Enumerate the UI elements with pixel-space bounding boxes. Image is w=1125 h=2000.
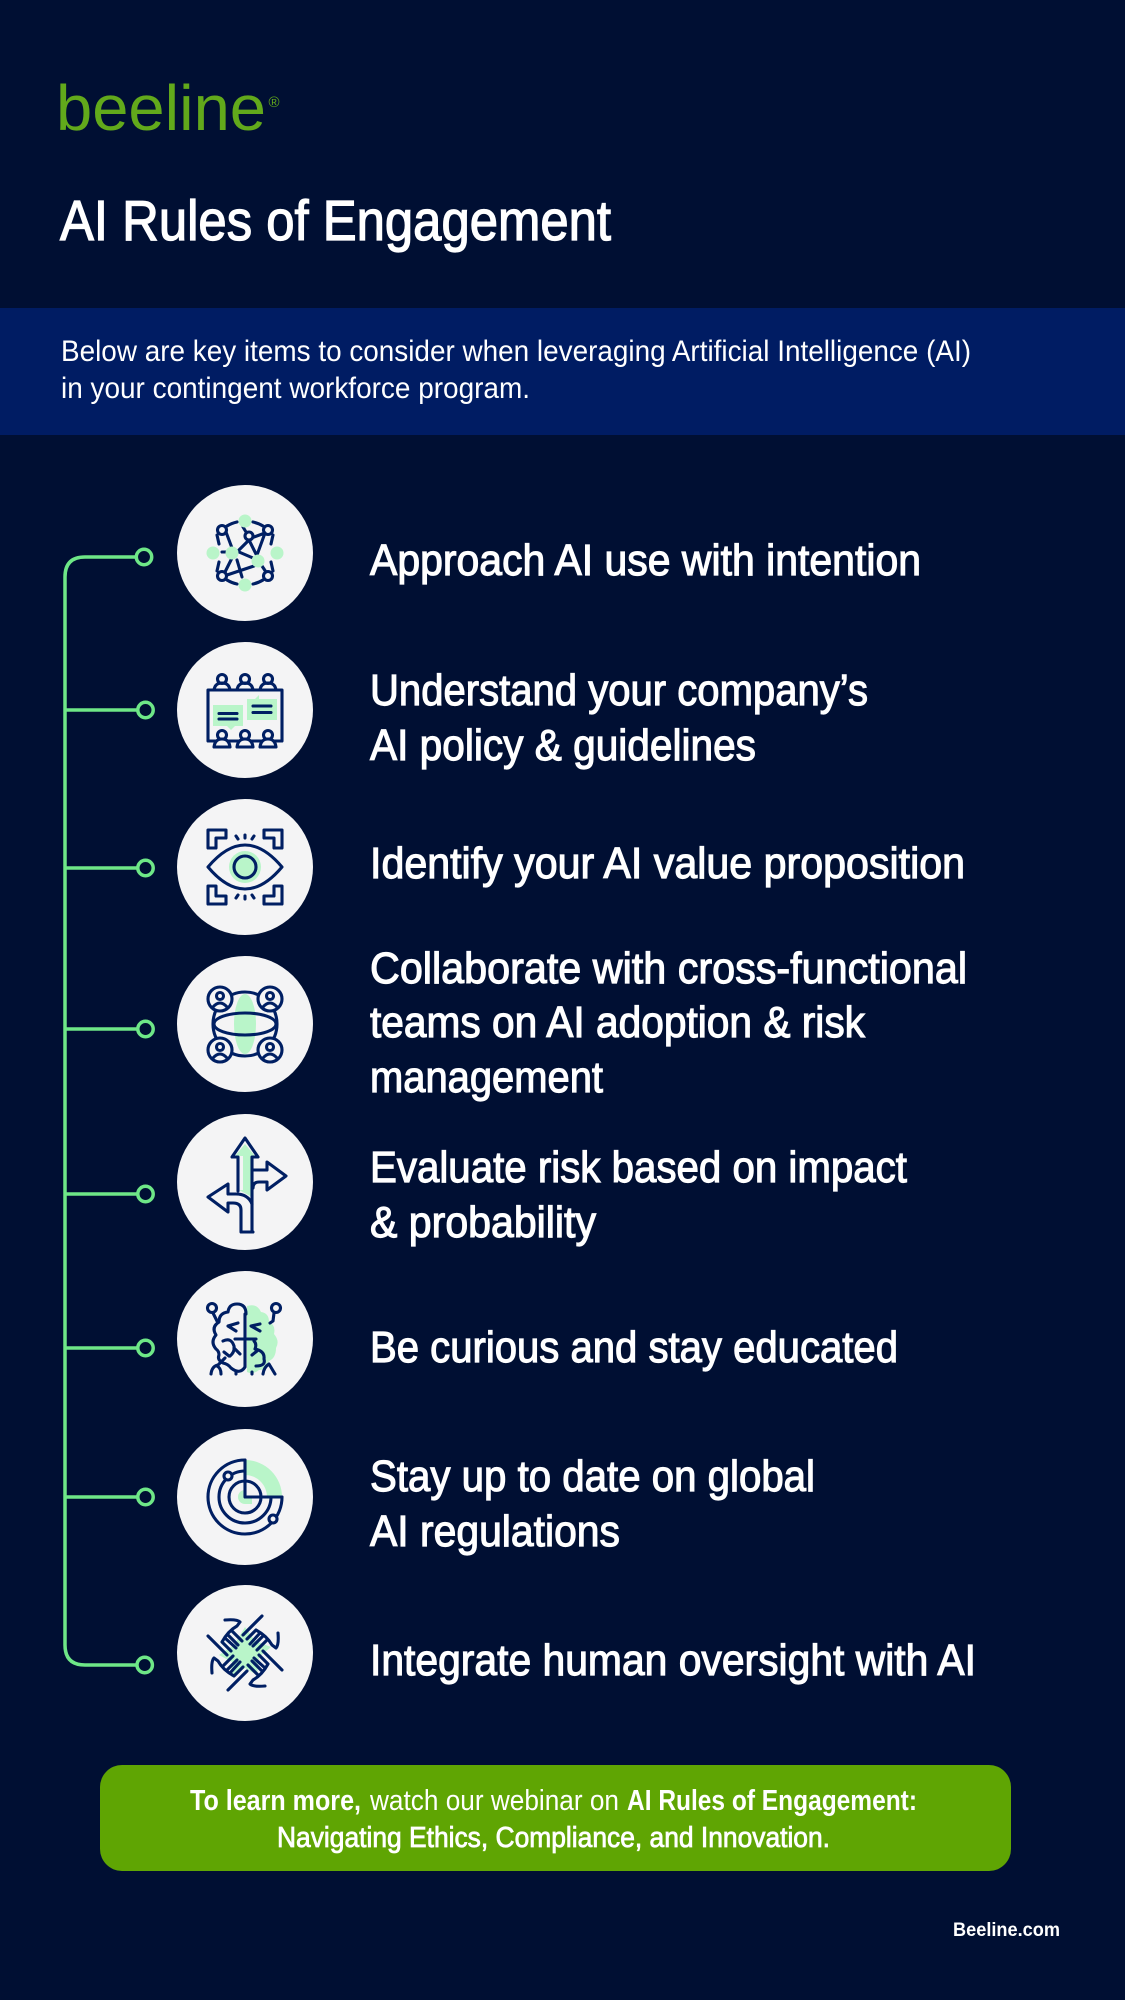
icon: eye scan [177,799,313,935]
item 8 text: Integrate human oversight with AI [370,1636,976,1685]
item 2 text: AI policy & guidelines [370,721,756,770]
intro band: Below are key items to consider when leveraging Artificial Intelligence (AI) [61,335,971,368]
intro band [0,308,1125,435]
item 4 text: teams on AI adoption & risk [370,998,866,1047]
item 2 text: Understand your company’s [370,666,868,715]
item 3 text: Identify your AI value proposition [370,839,965,888]
call to action button: Navigating Ethics, Compliance, and Innovation. [277,1822,830,1854]
item 4 text: Collaborate with cross-functional [370,944,967,993]
timeline connector [65,549,153,1673]
item 4 text [370,944,967,1102]
intro band: in your contingent workforce program. [61,372,530,405]
call to action button: AI Rules of Engagement: [627,1785,917,1817]
call to action button [100,1765,1011,1871]
item 6 text: Be curious and stay educated [370,1323,898,1372]
icon: AI brain [177,1271,313,1407]
icon: meeting table [177,642,313,778]
icon: collaboration circle [177,956,313,1092]
logo: beeline: beeline [56,72,266,144]
item 4 text: management [370,1053,603,1102]
title: AI Rules of Engagement [60,189,611,253]
call to action button: To learn more, [190,1785,361,1817]
item 7 text [370,1452,815,1556]
icon: joined hands [177,1585,313,1721]
footer link text: Beeline.com [953,1919,1060,1941]
item 5 text [370,1143,907,1247]
logo: beeline: ® [268,94,280,111]
item 5 text: Evaluate risk based on impact [370,1143,907,1192]
item 7 text: AI regulations [370,1507,620,1556]
icon: network globe [177,485,313,621]
item 2 text [370,666,868,770]
item 5 text: & probability [370,1198,596,1247]
call to action button: watch our webinar on [369,1785,619,1817]
icon: branching arrows [177,1114,313,1250]
icon: radar [177,1429,313,1565]
item 7 text: Stay up to date on global [370,1452,815,1501]
item 1 text: Approach AI use with intention [370,536,921,585]
